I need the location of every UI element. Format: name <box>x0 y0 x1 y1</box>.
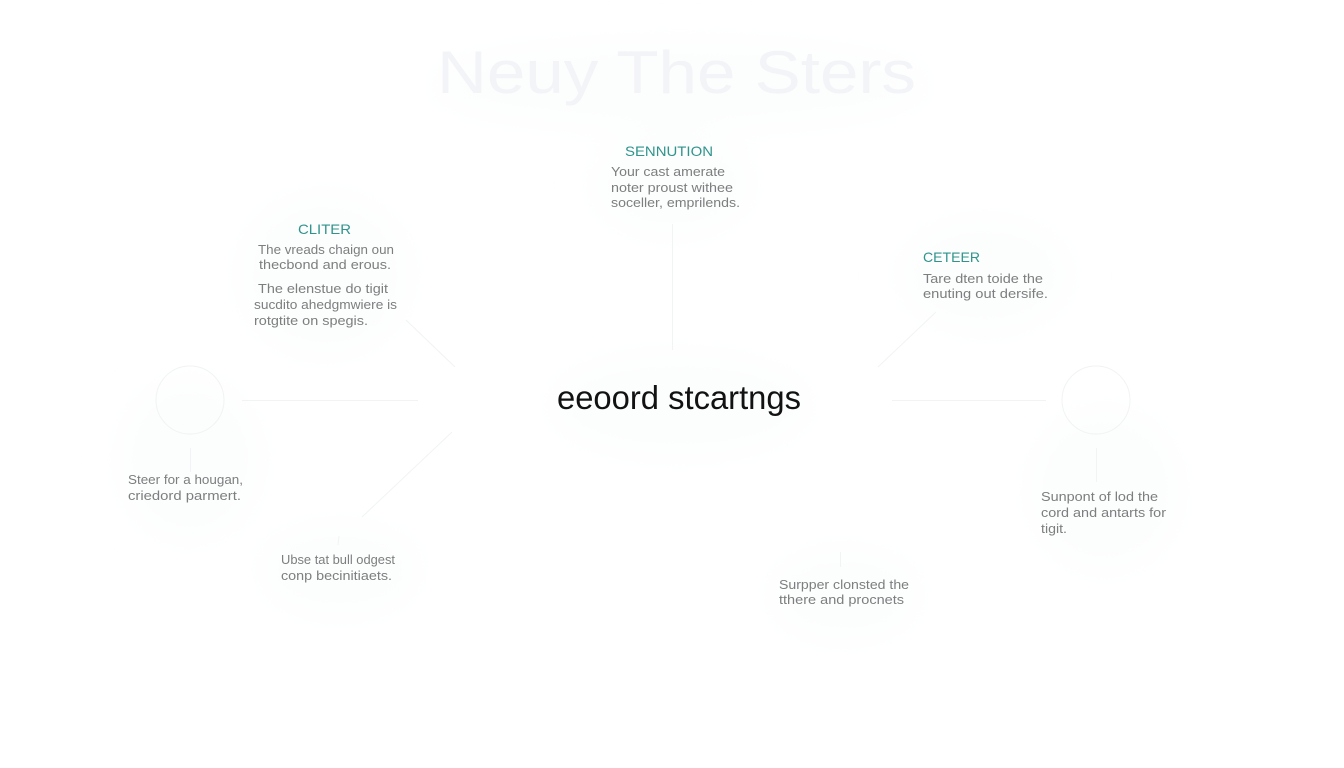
text block: lower right: Surpper clonsted the <box>779 577 909 592</box>
connector: upper left <box>406 320 455 367</box>
text block: lower left: Ubse tat bull odgest <box>281 552 395 567</box>
text block: Cliter: sucdito ahedgmwiere is <box>254 297 398 312</box>
connector: lower left <box>362 432 452 517</box>
text block: lower far right <box>1041 489 1167 536</box>
text block: lower left: conp becinitiaets. <box>281 568 392 583</box>
text block: Sennution: SENNUTION <box>625 143 713 159</box>
connector: left circle down <box>190 448 192 472</box>
text block: lower far right: Sunpont of lod the <box>1041 489 1158 504</box>
text block: lower far left: criedord parmert. <box>128 488 241 503</box>
connector: right circle down <box>1096 448 1098 482</box>
text block: Sennution: Your cast amerate <box>611 164 725 179</box>
text block: lower left <box>281 552 395 583</box>
title: Neuy The Sters <box>437 39 916 106</box>
text block: Cliter: The elenstue do tigit <box>258 281 388 296</box>
text block: lower far right: cord and antarts for <box>1041 505 1167 520</box>
connector: right horizontal <box>892 400 1046 402</box>
text block: Sennution: noter proust withee <box>611 180 733 195</box>
text block: Ceteer: CETEER <box>923 249 980 265</box>
text block: Sennution <box>611 143 740 210</box>
connector: lower right tick <box>840 552 842 567</box>
connector: upper right <box>878 312 936 367</box>
text block: Cliter: CLITER <box>298 221 351 237</box>
text block: lower far left: Steer for a hougan, <box>128 472 243 487</box>
left circle node <box>156 366 224 434</box>
text block: Cliter: The vreads chaign oun <box>258 242 394 257</box>
right circle node <box>1062 366 1130 434</box>
connector: left horizontal <box>242 400 418 402</box>
text block: lower right: tthere and procnets <box>779 592 905 607</box>
connector: lower left tick <box>338 536 339 545</box>
connector: top <box>672 224 674 350</box>
text block: Ceteer <box>923 249 1048 301</box>
text block: Cliter <box>254 221 398 328</box>
text block: Cliter: rotgtite on spegis. <box>254 313 368 328</box>
text block: Cliter: thecbond and erous. <box>259 257 391 272</box>
text block: Ceteer: Tare dten toide the <box>923 271 1043 286</box>
text block: Ceteer: enuting out dersife. <box>923 286 1048 301</box>
text block: lower far left <box>128 472 243 503</box>
text block: Sennution: soceller, emprilends. <box>611 195 740 210</box>
central label: eeoord stcartngs <box>557 379 801 416</box>
text block: lower far right: tigit. <box>1041 521 1067 536</box>
text block: lower right <box>779 577 909 607</box>
